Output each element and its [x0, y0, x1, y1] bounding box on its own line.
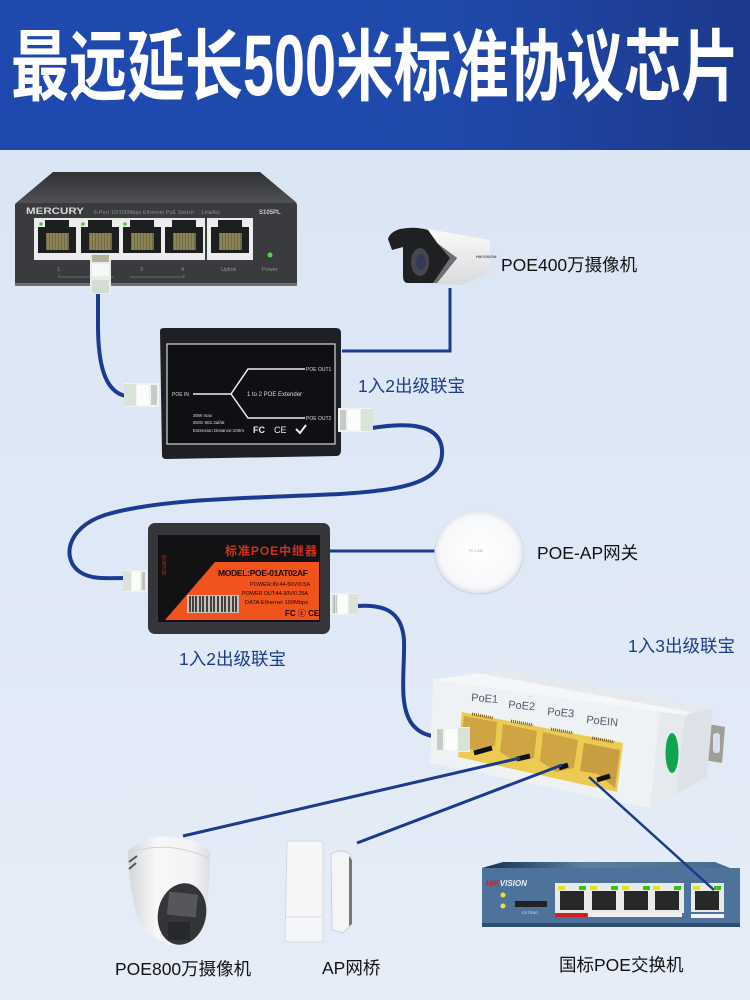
rj45 plug repeater in: [123, 570, 147, 592]
rj45 plug extender in: [124, 383, 159, 407]
extender 1 to 2: POE OUT1: [306, 367, 332, 373]
title: [11, 18, 739, 114]
extender 1 to 2: [160, 328, 341, 459]
switch: Mercury: Uplink: [221, 267, 237, 273]
rj45 plug extender out: [338, 408, 373, 432]
extender 1 to 2: POE IN: [172, 392, 189, 398]
extender 1 to 2: IEEE 802.3af/at: [193, 420, 225, 425]
splitter: PoEIN: [586, 714, 619, 729]
barcode: [187, 595, 239, 613]
rj45 plug in switch: [90, 253, 111, 294]
repeater: DATA:Ethernet 100Mbps: [245, 600, 308, 606]
AP gateway: [434, 511, 524, 595]
ports: [555, 883, 684, 913]
bullet camera: HIKVISION: [476, 254, 497, 259]
splitter: PoE2: [508, 699, 536, 713]
switch: Mercury: 1: [57, 267, 60, 273]
repeater: [148, 523, 330, 634]
rj45 plug repeater out: [331, 593, 358, 615]
label: POE switch: 国标POE交换机: [559, 955, 684, 975]
switch: Mercury: 5-Port 10/100Mbps Ethernet PoE Switch: [94, 210, 194, 216]
repeater: MODEL:POE-01AT02AF: [218, 568, 308, 578]
switch: Mercury: Power: [262, 267, 278, 273]
ports: [34, 218, 205, 260]
switch: Mercury: 4: [181, 267, 184, 273]
cable: repeater to AP gateway: [330, 550, 440, 552]
metal ear: [704, 724, 725, 763]
branch lines: [193, 369, 305, 418]
splitter: [430, 669, 725, 808]
cable: extender to repeater: [69, 425, 442, 578]
cable: splitter to POE switch: [589, 777, 714, 890]
green sticker: [666, 733, 678, 773]
title: 500: [243, 18, 336, 114]
label: cascade 3: 1入3出级联宝: [628, 636, 735, 656]
power LED: [268, 252, 272, 258]
extender 1 to 2: FC: [253, 425, 265, 435]
switch: Mercury: [15, 172, 297, 286]
extender 1 to 2: CE: [274, 425, 287, 435]
label: POE800 camera: POE800万摄像机: [115, 959, 252, 979]
repeater heading: 标准POE中继器: [225, 543, 317, 558]
label: AP bridge: AP网桥: [322, 958, 380, 978]
extender 1 to 2: 30W max: [193, 413, 213, 418]
repeater: FC ⓒ CE: [285, 609, 320, 618]
extender 1 to 2: Extension Distance:100m: [193, 428, 244, 433]
cable: out1 to bullet camera: [342, 288, 450, 351]
switch: Mercury: 3: [140, 267, 143, 273]
label: AP gateway: POE-AP网关: [537, 543, 638, 563]
bullet camera: [388, 228, 497, 285]
port labels: PoE1: [471, 692, 498, 706]
switch: Mercury: Link/Act: [202, 210, 220, 216]
header banner: [0, 0, 750, 150]
cable: repeater to splitter: [357, 606, 436, 737]
brand text: MERCURY: [26, 206, 84, 216]
repeater: POWER OUT:44-30V/0.25A: [242, 591, 308, 597]
AP bridge: [285, 841, 352, 942]
splitter: PoE3: [547, 706, 575, 720]
cable: switch to extender: [98, 292, 126, 396]
extender 1 to 2: POE OUT2: [306, 416, 332, 422]
extender 1 to 2: 1 to 2 POE Extender: [247, 392, 302, 398]
repeater: 标准POE: [160, 555, 167, 576]
switch: Mercury: S105PL: [259, 210, 281, 216]
cable: splitter to dome camera: [183, 758, 520, 836]
yellow ports: [458, 712, 623, 792]
AP gateway: TP-LINK: [468, 548, 484, 553]
repeater: POWER:IN:44-50V/0.5A: [250, 582, 310, 588]
label: POE400 camera: POE400万摄像机: [501, 255, 638, 275]
POE switch: Hikvision: [482, 862, 740, 927]
dome camera: [128, 837, 212, 949]
brand: HIKVISION: [486, 879, 527, 888]
cable: splitter to AP bridge: [357, 765, 562, 843]
title: 最远延长: [11, 23, 243, 111]
label: cascade 1: 1入2出级联宝: [358, 376, 465, 396]
POE switch: Hikvision: EXTEND: [522, 910, 538, 915]
rj45 plug in splitter: [435, 727, 470, 752]
label: cascade 2: 1入2出级联宝: [179, 649, 286, 669]
